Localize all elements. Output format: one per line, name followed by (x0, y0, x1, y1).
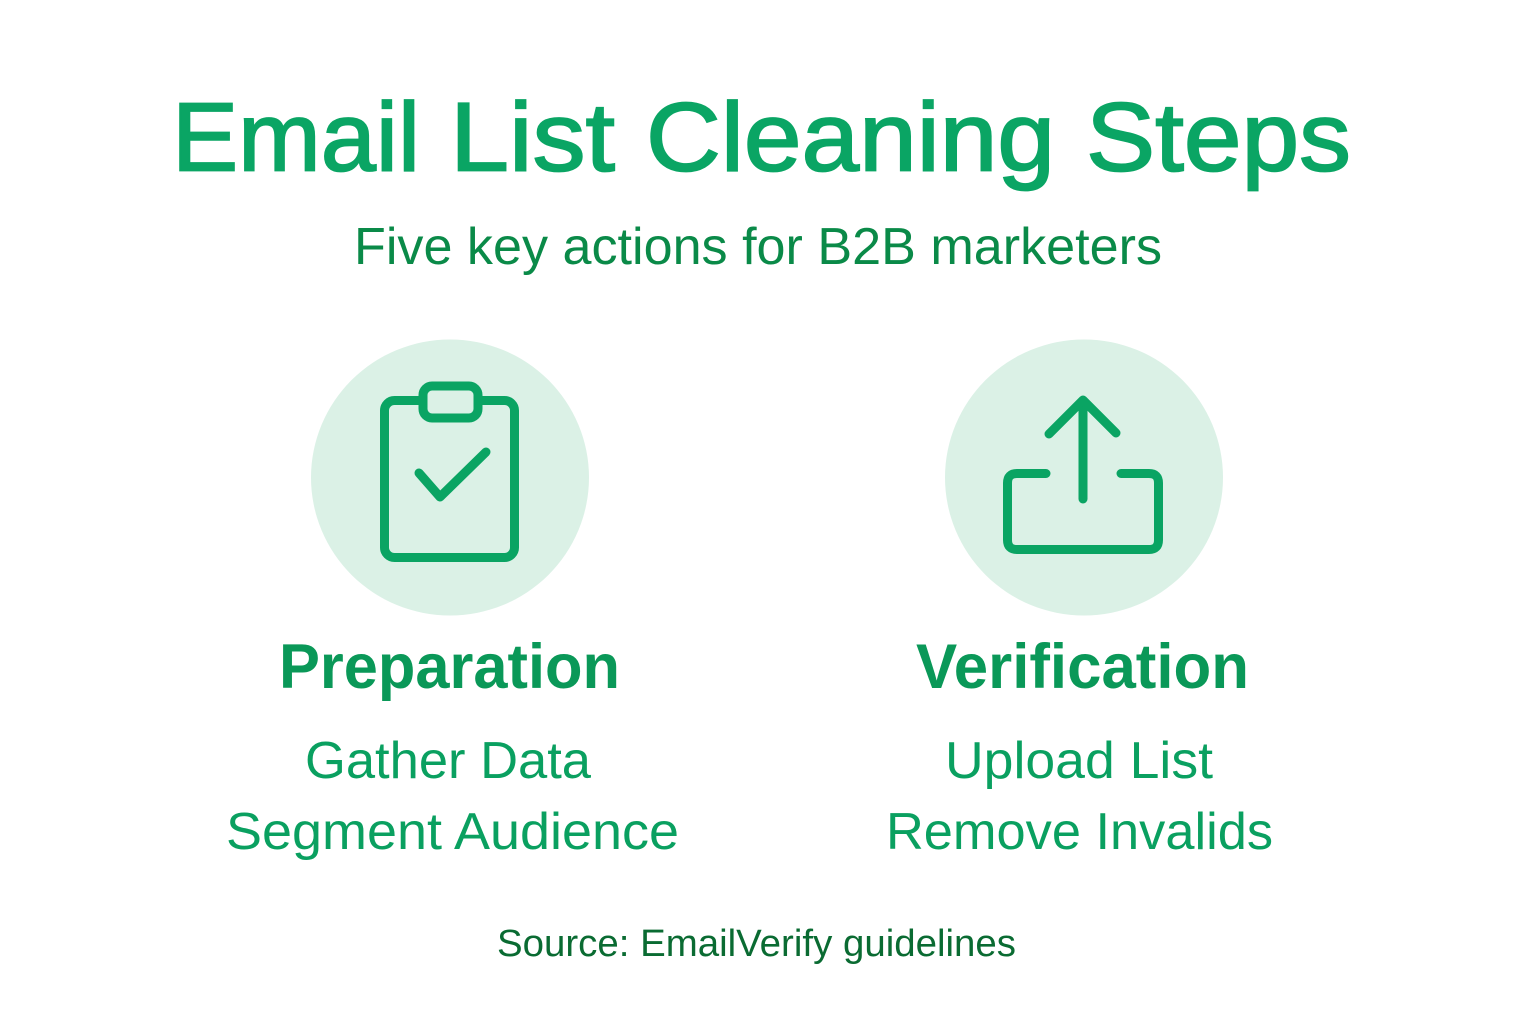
title: List (450, 82, 615, 192)
icon background circle: verification (945, 340, 1223, 616)
panel: verification (886, 340, 1273, 861)
source note: Source: EmailVerify guidelines (497, 923, 1016, 965)
step: segment audience: Segment Audience (226, 803, 679, 861)
panel: preparation (226, 340, 679, 861)
icon: clipboard with check mark (384, 386, 514, 558)
title: Email (172, 82, 420, 192)
step: gather data: Gather Data (305, 732, 591, 790)
heading: preparation: Preparation (279, 632, 620, 702)
step: upload list: Upload List (945, 732, 1214, 790)
title: Steps (1086, 82, 1351, 192)
step: remove invalids: Remove Invalids (886, 803, 1273, 861)
title (172, 82, 1351, 192)
heading: verification: Verification (916, 632, 1249, 702)
subtitle: Five key actions for B2B marketers (354, 218, 1162, 276)
title: Cleaning (646, 82, 1055, 192)
icon background circle: preparation (311, 340, 589, 616)
icon: upload arrow and tray (1008, 400, 1158, 550)
